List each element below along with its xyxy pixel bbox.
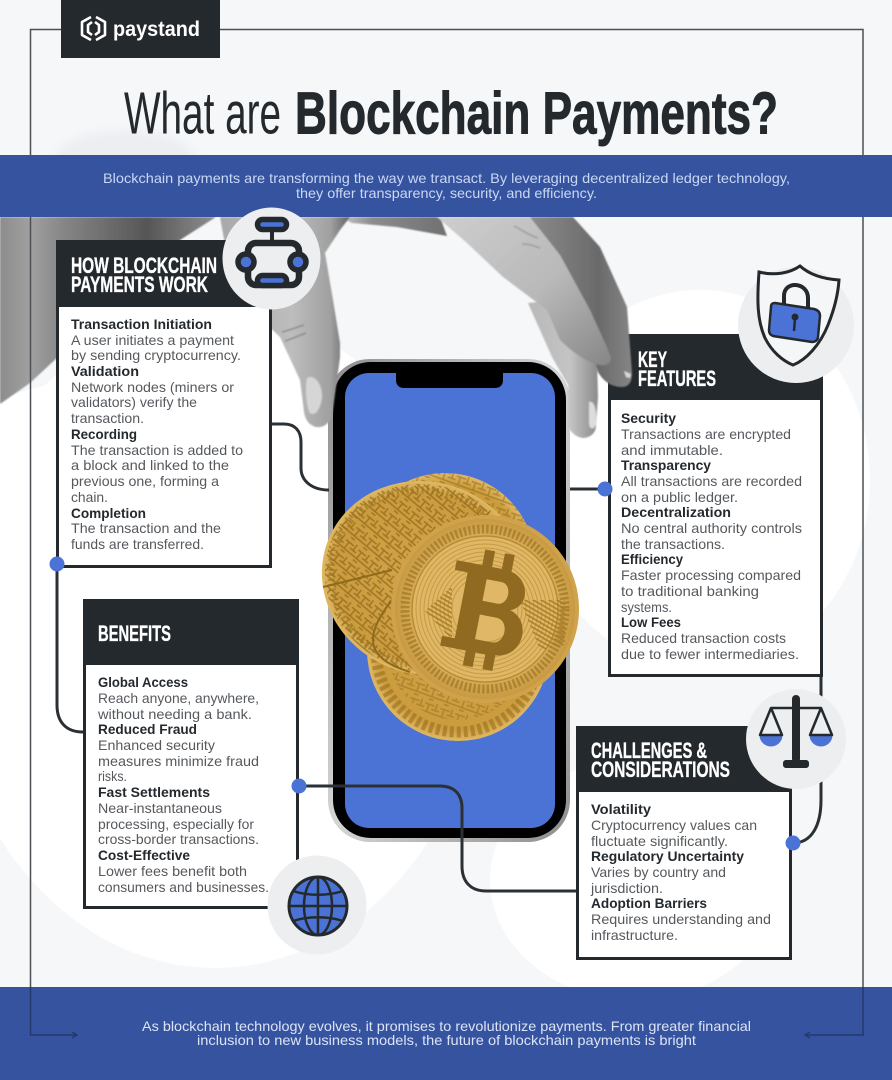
hand holding the phone: [0, 217, 632, 438]
intro band: [0, 155, 892, 217]
body text: the transactions.: [621, 537, 725, 552]
body text: Global Access: [98, 675, 188, 690]
body text: validators) verify the: [71, 395, 197, 410]
coin circuit wedges: [425, 586, 565, 650]
body text: measures minimize fraud: [98, 754, 259, 769]
body text: chain.: [71, 490, 108, 505]
body text: Decentralization: [621, 505, 731, 520]
body text: Completion: [71, 506, 146, 521]
body text: The transaction and the: [71, 521, 221, 536]
body text: Regulatory Uncertainty: [591, 849, 744, 864]
closing text: As blockchain technology evolves, it promises to revolutionize payments. From greater financial: [142, 1019, 751, 1034]
faint ghost of hand above band: [55, 130, 195, 190]
ring finger: [528, 300, 598, 438]
body text: without needing a bank.: [97, 707, 252, 722]
body text: Efficiency: [621, 552, 683, 567]
body text: Security: [621, 411, 676, 426]
body text: [71, 317, 243, 552]
thumb creases: [282, 325, 306, 341]
frame ends with arrows: [30, 987, 863, 1038]
body text: Fast Settlements: [98, 785, 210, 800]
front coin: [391, 515, 579, 703]
heading: CONSIDERATIONS: [591, 757, 730, 782]
body text: Faster processing compared: [621, 568, 801, 583]
body text: Lower fees benefit both: [98, 864, 247, 879]
panel: benefits: [83, 599, 299, 908]
back finger: [520, 217, 632, 387]
knuckle creases: [514, 226, 540, 248]
title: What are: [124, 80, 281, 146]
logo wordmark: paystand: [113, 18, 200, 41]
body text: jurisdiction.: [590, 881, 663, 896]
phone notch: [396, 372, 503, 388]
body text: [621, 411, 802, 662]
body text: Enhanced security: [98, 738, 215, 753]
body text: fluctuate significantly.: [591, 834, 728, 849]
intro text: Blockchain payments are transforming the way we transact. By leveraging decentralized ledger technology,: [103, 171, 790, 186]
body text: Near-instantaneous: [98, 801, 222, 816]
body text: on a public ledger.: [621, 490, 738, 505]
phone casing: [328, 359, 570, 842]
body text: processing, especially for: [98, 817, 254, 832]
panel: key features: [608, 334, 823, 676]
node dot: [598, 482, 612, 496]
closing band: [0, 987, 892, 1080]
title: [124, 80, 778, 146]
node dot: [786, 836, 800, 850]
heading: [638, 347, 716, 391]
body text: to traditional banking: [621, 584, 759, 599]
thumb: [220, 217, 350, 427]
body text: funds are transferred.: [71, 537, 204, 552]
body text: Reduced transaction costs: [621, 631, 786, 646]
body text: Varies by country and: [591, 865, 726, 880]
connectors: [57, 424, 821, 891]
icon: flowchart robot: [222, 208, 320, 310]
bitcoin symbol: [437, 544, 537, 675]
node dot: [292, 778, 306, 794]
body text: transaction.: [71, 411, 144, 426]
body text: Validation: [71, 364, 139, 379]
body text: cross-border transactions.: [98, 832, 259, 847]
node dot: [50, 556, 64, 572]
body text: Transparency: [621, 458, 711, 473]
body text: Reduced Fraud: [98, 722, 197, 737]
index finger: [437, 217, 611, 365]
body text: by sending cryptocurrency.: [71, 348, 241, 363]
body text: and immutable.: [621, 443, 723, 458]
closing text: inclusion to new business models, the future of blockchain payments is bright: [197, 1033, 696, 1048]
body text: The transaction is added to: [71, 443, 243, 458]
heading: CHALLENGES &: [591, 738, 707, 763]
body text: Volatility: [591, 802, 651, 817]
body text: Transaction Initiation: [71, 317, 212, 332]
thumb nail: [306, 377, 322, 414]
phone: [328, 359, 570, 842]
left coin: [294, 452, 556, 704]
body text: [97, 675, 269, 895]
icon: shield and padlock: [738, 266, 854, 383]
body text: Reach anyone, anywhere,: [98, 691, 259, 706]
bitcoin coins: [294, 452, 579, 741]
body text: Low Fees: [621, 615, 681, 630]
body text: systems.: [621, 600, 672, 615]
logo mark: [82, 17, 105, 40]
icon: globe: [268, 856, 366, 954]
body text: A user initiates a payment: [71, 333, 234, 348]
heading: [71, 253, 217, 297]
body text: Cryptocurrency values can: [591, 818, 757, 833]
body text: Transactions are encrypted: [621, 427, 791, 442]
heading: HOW BLOCKCHAIN: [71, 253, 217, 278]
back coin top: [355, 473, 535, 653]
heading: KEY: [638, 347, 667, 372]
icon: balance scale: [746, 689, 846, 789]
body text: Cost-Effective: [98, 848, 190, 863]
heading: FEATURES: [638, 366, 716, 391]
logo block: [61, 0, 220, 58]
panel: challenges and considerations: [576, 726, 792, 958]
body text: due to fewer intermediaries.: [621, 647, 799, 662]
body text: consumers and businesses.: [98, 880, 269, 895]
heading: BENEFITS: [98, 621, 171, 646]
coin rings: [416, 540, 554, 678]
body text: All transactions are recorded: [621, 474, 802, 489]
ring finger nail: [589, 402, 596, 428]
back finger nail: [624, 371, 631, 378]
background blobs: [0, 290, 870, 1000]
intro text: they offer transparency, security, and efficiency.: [296, 186, 597, 201]
body text: No central authority controls: [621, 521, 802, 536]
arm and wrist: [0, 217, 216, 404]
body text: [590, 802, 771, 943]
body text: Recording: [71, 427, 137, 442]
heading: PAYMENTS WORK: [71, 272, 208, 297]
body text: Network nodes (miners or: [71, 380, 234, 395]
body text: infrastructure.: [591, 928, 678, 943]
panel: how blockchain payments work: [56, 240, 272, 566]
intro text: [103, 171, 790, 201]
back coin bottom: [367, 559, 549, 741]
body text: risks.: [98, 769, 127, 784]
closing text: [142, 1019, 751, 1048]
body text: a block and linked to the: [71, 458, 229, 473]
body text: previous one, forming a: [71, 474, 219, 489]
heading: [591, 738, 730, 782]
palm underside: [340, 217, 447, 236]
phone screen: [345, 373, 555, 828]
body text: Adoption Barriers: [591, 896, 707, 911]
body text: Requires understanding and: [591, 912, 771, 927]
